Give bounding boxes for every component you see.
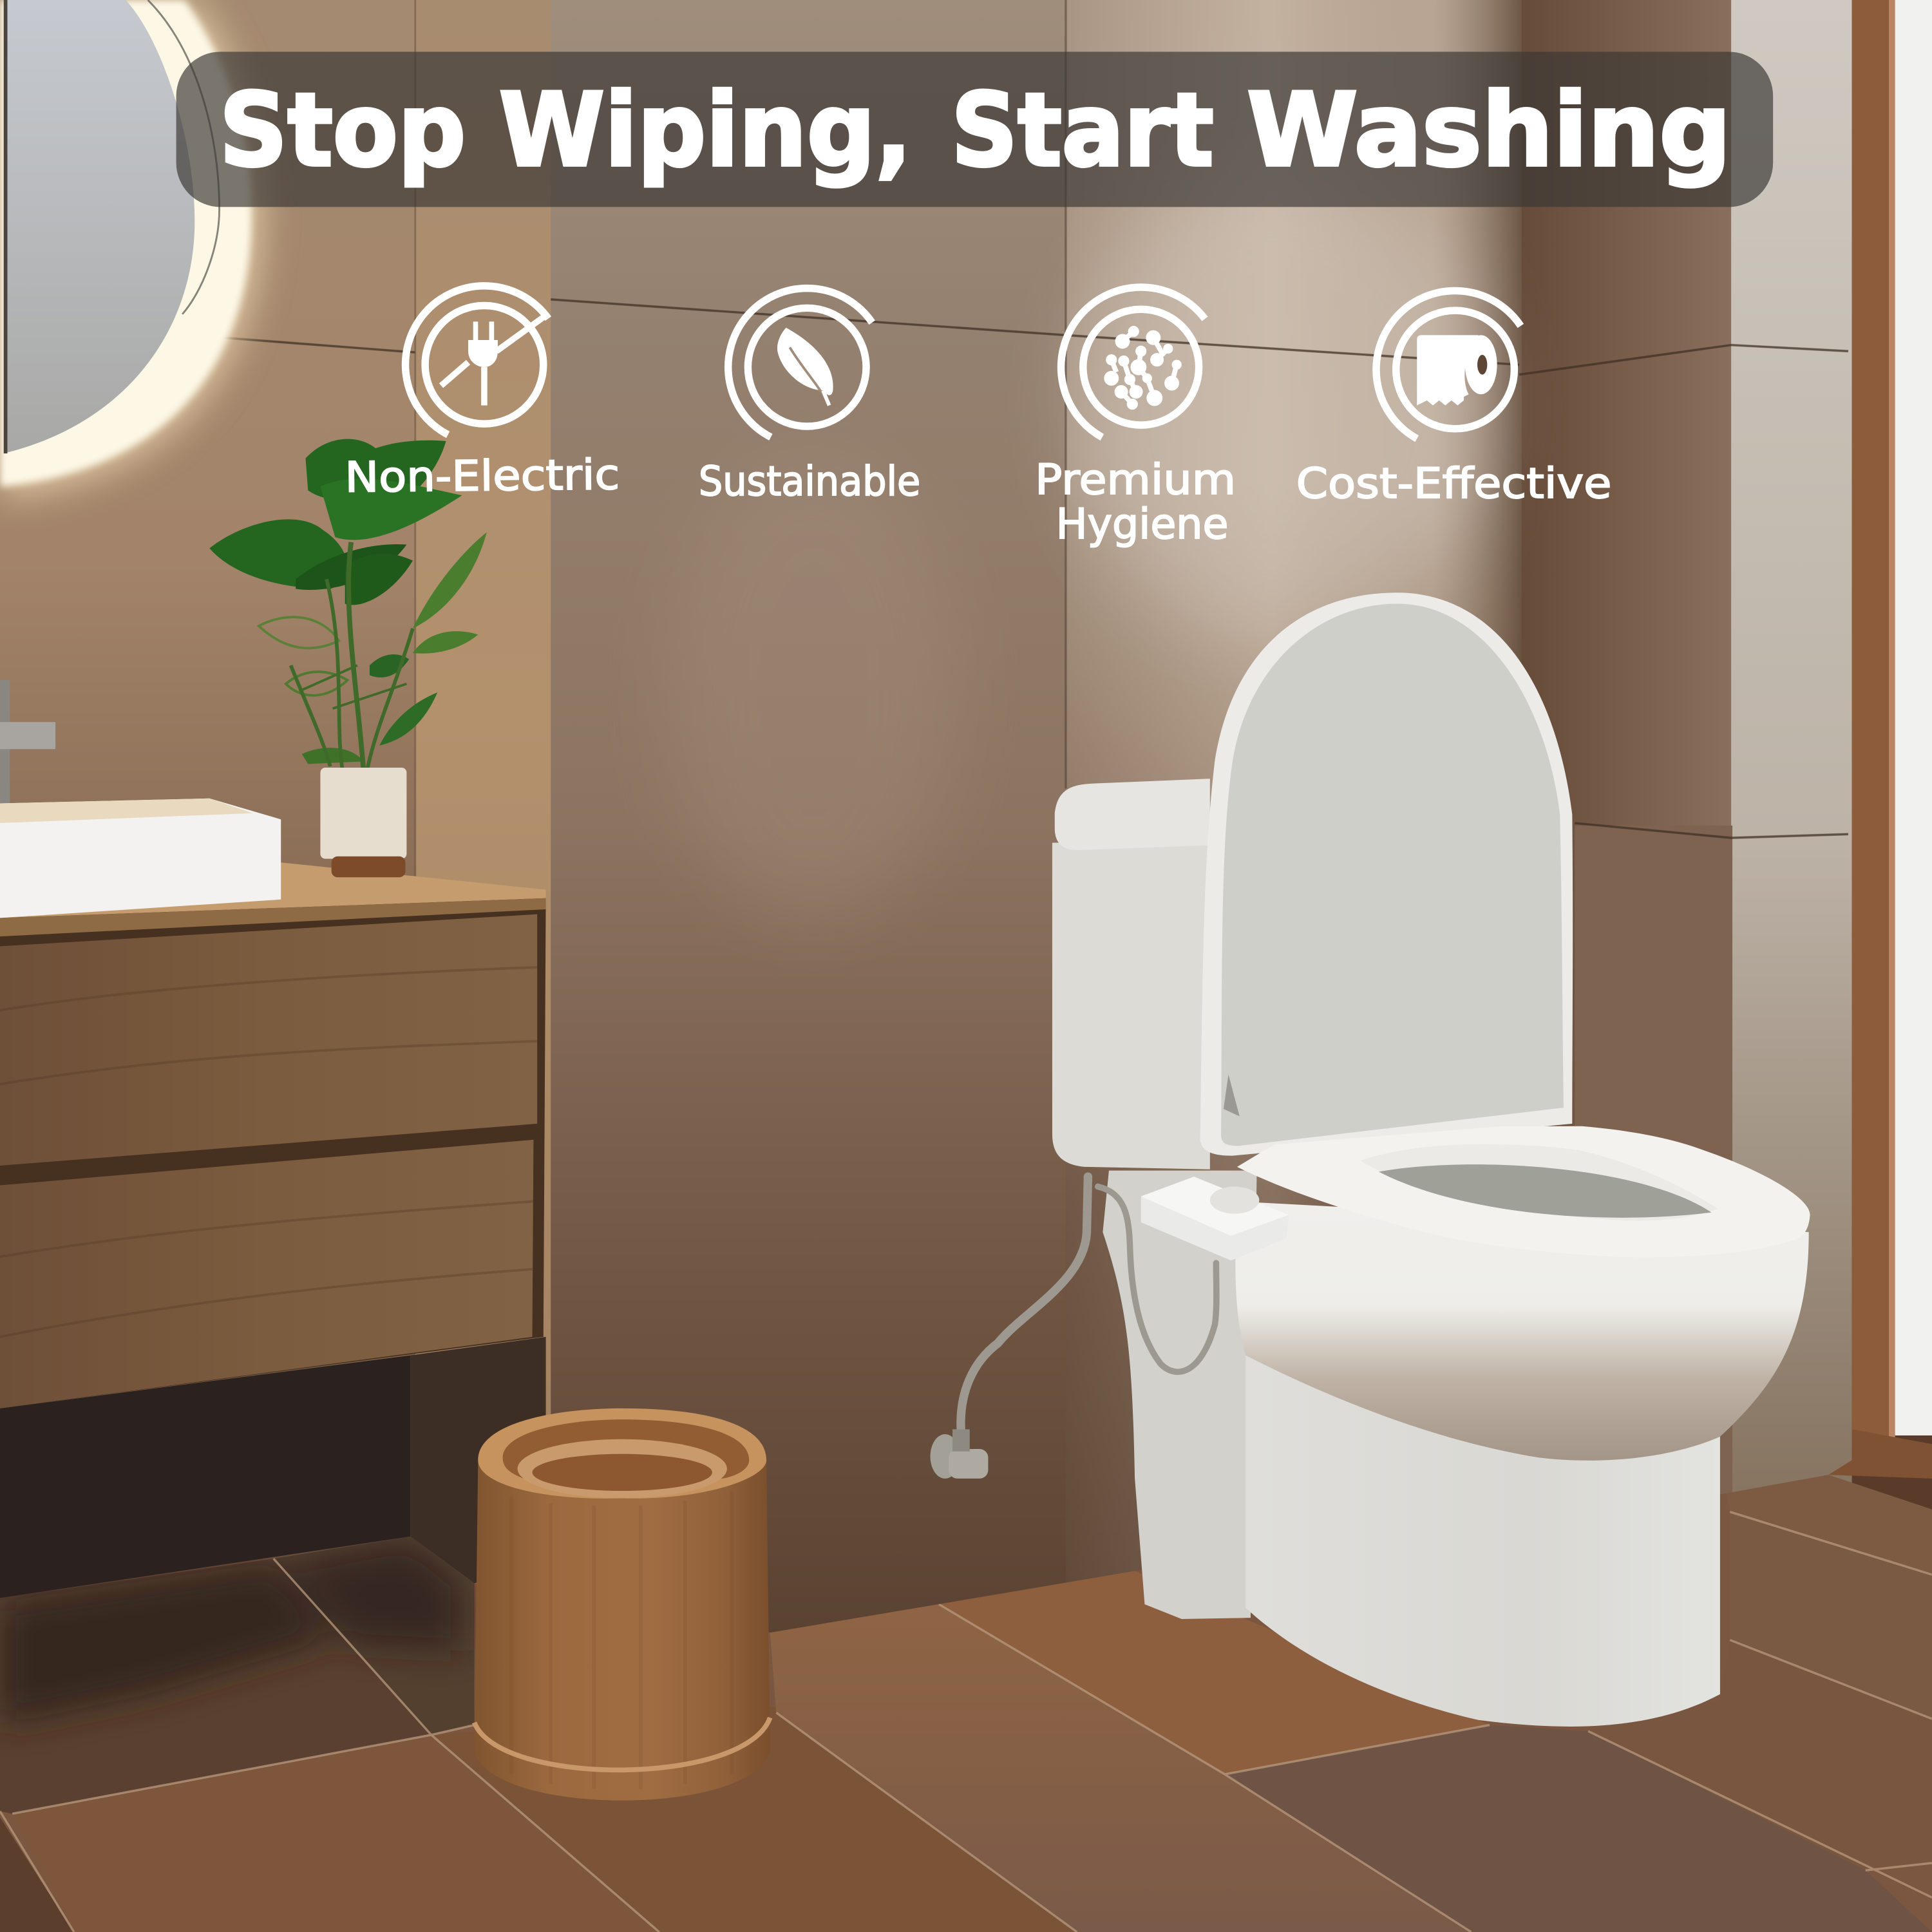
round backlit mirror (0, 0, 264, 499)
title text: Washing (1247, 71, 1731, 189)
potted plant (209, 439, 487, 877)
toilet rear pedestal (1103, 1171, 1257, 1619)
bidet control unit (1141, 1177, 1289, 1260)
toilet (931, 592, 1810, 1727)
raised seat lid (1200, 592, 1573, 1156)
label: Premium (1035, 456, 1236, 504)
feature: cost-effective (1296, 290, 1612, 508)
wooden waste bin (475, 1408, 770, 1801)
label: Sustainable (699, 457, 920, 505)
label: Cost-Effective (1296, 460, 1612, 508)
title banner (176, 52, 1773, 207)
icon: leaf (728, 289, 872, 437)
vanity cabinet (0, 862, 546, 1598)
toilet bowl (1235, 1201, 1809, 1461)
title text: Stop (220, 71, 466, 189)
toilet seat (1237, 1126, 1810, 1257)
title text: Start (951, 71, 1214, 189)
shut-off valve (931, 1429, 988, 1479)
supply hoses (961, 1177, 1217, 1432)
feature: premium hygiene (1035, 287, 1236, 549)
icon: toilet paper roll (1376, 290, 1520, 439)
toilet tank (1052, 779, 1210, 1170)
label second line: Hygiene (1056, 500, 1229, 549)
feature: non-electric (345, 286, 620, 502)
toilet base (1245, 1331, 1720, 1727)
sink and faucet (0, 680, 281, 918)
title text: Wiping, (499, 71, 912, 189)
floor (0, 1466, 1932, 1932)
label: Non-Electric (345, 451, 620, 502)
icon: molecules (1061, 287, 1205, 437)
feature: sustainable (699, 289, 920, 505)
icon: crossed-out plug (406, 286, 548, 435)
